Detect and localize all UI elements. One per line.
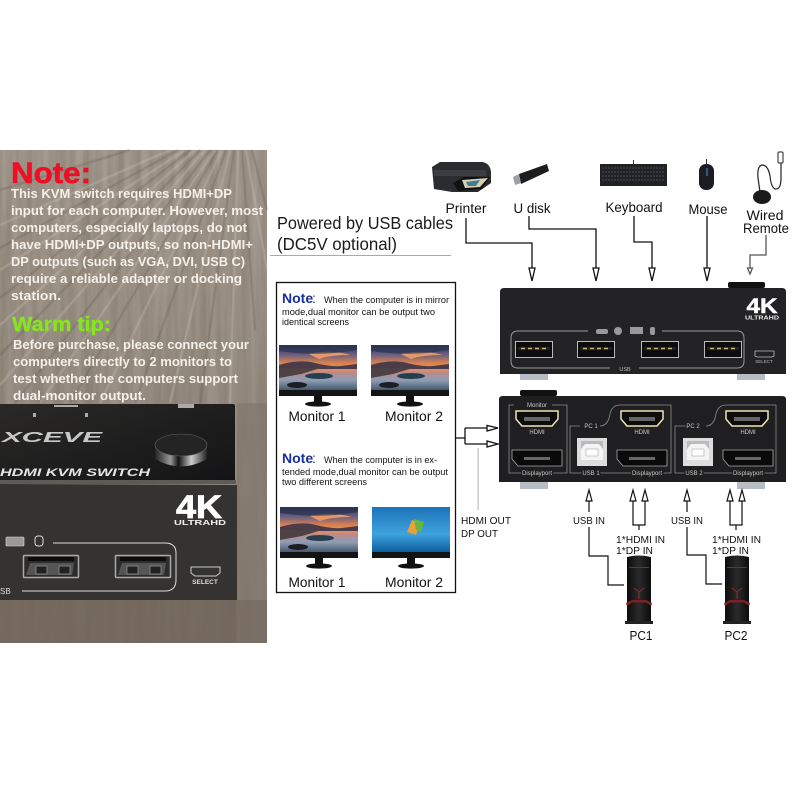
feet [520,374,548,380]
note: extended mode: : [312,450,316,466]
text block: note body [11,187,264,303]
arrows: PC2 connections [684,490,745,584]
text block: note body: This KVM switch requires HDMI+DP [11,187,232,201]
note: mirror mode: mode,dual monitor can be output two [282,307,435,318]
icon: PC1 tower [625,556,653,624]
arrow: mouse [704,216,710,281]
labels: PC 1 [584,424,598,430]
icon: mouse [699,159,714,190]
text block: note body: input for each computer. However, most [11,204,264,218]
labels: Displayport [632,471,662,477]
icon: printer [432,162,491,192]
text block: note body: station. [11,289,61,303]
icon: keyboard [600,160,667,186]
monitor 1 extended [280,507,358,590]
labels: Monitor [527,403,547,409]
text block: warm tip body [13,338,249,403]
USB port 3 [24,556,78,578]
arrows: peripherals to USB ports [466,216,766,281]
Ultra HD label: ULTRAHD [174,518,227,527]
arrow: printer [466,218,535,281]
text block: note body: require a reliable adapter or docking [11,272,242,286]
device front face [0,484,237,600]
PC1 HDMI port [621,411,663,426]
PC2 DP port [723,450,773,466]
knob [520,390,557,396]
label: keyboard: Keyboard [606,199,662,215]
label: HDMI OUT DP OUT: HDMI OUT [461,515,512,527]
knob [728,282,765,288]
device: KVM front panel [500,282,786,380]
labels: HDMI [740,430,756,436]
PC1 USB-B port [577,438,607,466]
4K logo: 4K [746,295,778,318]
4K logo: 4K [176,489,222,525]
labels: HDMI [634,430,650,436]
note: mirror mode: : [312,290,316,306]
label: mouse: Mouse [688,201,728,217]
note: mirror mode [282,290,449,328]
feet [520,482,548,489]
arrow: monitor outputs [456,426,498,447]
PC1 DP port [617,450,667,466]
icon: U disk [513,164,549,185]
monitor 2 mirror [371,345,449,424]
device top face [0,404,235,482]
Ultra HD: ULTRAHD [745,316,779,322]
labels [522,403,763,477]
note: mirror mode: identical screens [282,317,349,328]
heading: Note: Note: [11,157,91,190]
select port [755,351,774,357]
label: PC1 inputs: 1*HDMI IN [616,534,665,546]
label: PC2 inputs: 1*DP IN [712,545,749,557]
text block: note body: computers, especially laptops, do not [11,221,248,235]
leader line: HDMI out [478,448,479,510]
monitor 1 extended: Monitor 1 [288,574,346,590]
USB bracket [511,331,744,368]
device: KVM rear panel [499,390,786,489]
PC2 USB-B port [683,438,713,466]
label: HDMI OUT DP OUT [461,515,512,540]
arrows: PC1 connections [586,490,648,585]
note: extended mode: Note [282,450,313,466]
USB label: USB [619,367,631,373]
arrow: wired remote [748,235,766,274]
heading: Warm tip: Warm tip: [12,314,111,336]
PC2 HDMI port [726,411,768,426]
labels: Displayport [733,471,763,477]
select port [191,567,220,576]
monitor 2 mirror: Monitor 2 [385,408,443,424]
USB port 4 [116,556,170,578]
arrow: U disk [529,216,599,281]
mouse icon [35,536,43,546]
farmland and wood background [0,150,267,643]
heading: powered by USB cables [277,213,453,254]
product name: HDMI KVM SWITCH [0,467,152,479]
USB label: SB [0,587,11,596]
panel: left photo with notes [0,150,267,643]
USB port 1 [516,342,552,358]
labels: Displayport [522,471,552,477]
label: USB IN PC1: USB IN [573,515,605,527]
monitor 1 mirror: Monitor 1 [288,408,346,424]
device icons [596,327,655,335]
label: printer: Printer [446,200,487,216]
divider [270,255,451,256]
chassis [500,288,786,374]
panel: monitor modes [276,282,456,592]
labels: PC 2 [686,424,700,430]
keyboard icon [6,537,24,546]
top face small icons [33,404,194,417]
select label: SELECT [755,359,773,364]
chassis [499,396,786,482]
selector knob [155,434,207,466]
select label: SELECT [192,579,218,586]
text block: note body: DP outputs (such as VGA, DVI, USB C) [11,255,245,269]
note: extended mode [282,450,448,488]
monitor HDMI port [516,411,558,426]
photo: KVM switch close-up [0,404,237,600]
icon: PC2 tower [723,556,751,624]
note: extended mode: two different screens [282,477,367,488]
text block: warm tip body: Before purchase, please connect your [13,338,249,352]
note: extended mode: tended mode,dual monitor can be output [282,467,448,478]
monitor 2 extended [372,507,450,590]
heading: powered by USB cables: Powered by USB cables [277,213,453,233]
text block: warm tip body: dual-monitor output. [13,389,146,403]
bracket lines [509,405,776,473]
USB port 3 [642,342,678,358]
label: PC1 inputs: 1*DP IN [616,545,653,557]
port bracket [22,543,176,591]
label: HDMI OUT DP OUT: DP OUT [461,528,499,540]
label: PC2 inputs: 1*HDMI IN [712,534,761,546]
heading: powered by USB cables: (DC5V optional) [277,234,397,254]
brand logo: XCEVE [0,429,104,446]
text block: warm tip body: computers directly to 2 monitors to [13,355,232,369]
USB port 2 [578,342,614,358]
label: remote: Remote [743,220,789,236]
note: mirror mode: When the computer is in mirror [324,295,449,306]
monitor DP port [512,450,562,466]
arrow: keyboard [634,216,655,281]
labels: HDMI [529,430,545,436]
note: mirror mode: Note [282,290,313,306]
label: wired remote: Wired [746,207,784,223]
note: extended mode: When the computer is in ex- [324,455,437,466]
icon: wired remote [753,152,783,204]
label: PC1: PC1 [630,628,652,643]
label: PC1 inputs [616,534,665,557]
USB port 4 [704,342,742,358]
label: USB IN PC2: USB IN [671,515,703,527]
monitor 2 extended: Monitor 2 [385,574,443,590]
labels: USB 1 [582,471,600,477]
text block: note body: have HDMI+DP outputs, so non-HDMI+ [11,238,253,252]
labels: USB 2 [685,471,703,477]
label: PC2: PC2 [724,628,748,643]
monitor 1 mirror [279,345,357,424]
text block: warm tip body: test whether the computers support [13,372,239,386]
label: PC2 inputs [712,534,761,557]
label: U disk: U disk [514,200,551,216]
